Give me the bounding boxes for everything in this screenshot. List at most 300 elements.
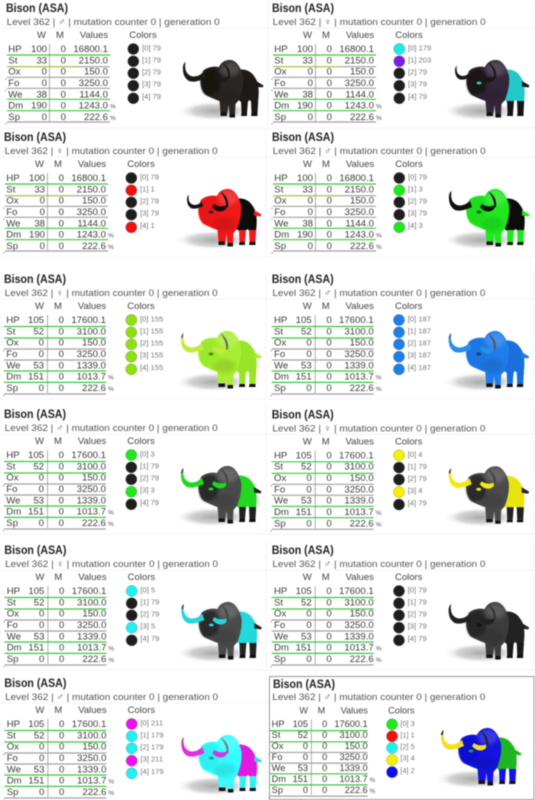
stats table: % xyxy=(370,788,376,795)
stats table: 0 xyxy=(308,78,313,89)
stats table: 0 xyxy=(308,112,313,123)
stats table: % xyxy=(376,510,382,517)
color swatches: [0] 79 xyxy=(140,172,159,182)
stats table: 222.6 xyxy=(84,112,108,123)
stats table: 17600.1 xyxy=(339,450,374,461)
stats table: 150.0 xyxy=(350,196,374,207)
stats table: 0 xyxy=(327,44,332,55)
stats table: HP xyxy=(6,173,20,184)
stats table: 151 xyxy=(296,372,312,383)
stats table: 0 xyxy=(327,101,332,112)
stats table: We xyxy=(274,360,288,371)
stats table: 100 xyxy=(297,173,313,184)
stats table: 0 xyxy=(306,349,312,360)
stats table: HP xyxy=(274,450,287,461)
color swatches: [1] 79 xyxy=(408,462,427,471)
stats table: 0 xyxy=(59,484,64,495)
stats table: Dm xyxy=(272,774,286,784)
color swatches: [2] 79 xyxy=(142,68,161,76)
stats table: Values xyxy=(341,706,368,716)
stats table: 222.6 xyxy=(82,241,106,252)
stats table: 0 xyxy=(59,173,64,184)
stats table: 0 xyxy=(326,518,332,529)
panel: bison 3, red xyxy=(0,129,266,257)
stats table: 3250.0 xyxy=(344,349,374,360)
stats table: 0 xyxy=(61,89,66,100)
stats table: Sp xyxy=(6,518,18,529)
stats table: Dm xyxy=(6,230,21,241)
stats table: 0 xyxy=(326,620,332,631)
stats table: 53 xyxy=(298,763,308,773)
color swatches xyxy=(126,718,164,779)
color swatches: [4] 79 xyxy=(142,92,161,101)
title: Bison (ASA) xyxy=(4,676,66,690)
stats table: HP xyxy=(6,450,20,461)
stats table: 1013.7 xyxy=(77,643,106,654)
stats table: % xyxy=(108,386,114,393)
stats table: Dm xyxy=(274,507,289,518)
stats table: 1144.0 xyxy=(345,89,374,100)
stats table: 1144.0 xyxy=(77,218,106,229)
stats table: Values xyxy=(346,436,374,447)
stats table: 33 xyxy=(302,55,313,66)
title: Bison (ASA) xyxy=(272,1,334,15)
level info line: Level 362 | ♂ | mutation counter 0 | generation 0 xyxy=(5,423,218,434)
stats table: Values xyxy=(80,30,108,41)
stats table: 150.0 xyxy=(350,609,374,620)
stats table: 0 xyxy=(327,196,332,207)
stats table: St xyxy=(7,730,16,741)
icon: bison xyxy=(175,735,262,796)
level info line: Level 362 | ♂ | mutation counter 0 | generation 0 xyxy=(272,288,485,299)
stats table: 52 xyxy=(33,461,44,472)
stats table: 52 xyxy=(33,326,44,337)
stats table: Colors xyxy=(127,301,155,312)
stats table: 0 xyxy=(327,55,332,66)
stats table: 150.0 xyxy=(345,741,368,751)
title: Bison (ASA) xyxy=(4,272,66,286)
stats table: Colors xyxy=(127,436,155,447)
stats table: 0 xyxy=(326,643,332,654)
stats table: 0 xyxy=(59,473,64,484)
stats table: % xyxy=(108,244,114,251)
color swatches xyxy=(126,172,159,233)
stats table: 2150.0 xyxy=(345,55,374,66)
stats table: 17600.1 xyxy=(339,315,374,326)
stats table: Ox xyxy=(7,609,19,620)
stats table: W xyxy=(299,706,308,716)
stats table: 0 xyxy=(326,383,332,394)
stats table: Fo xyxy=(274,620,285,631)
stats table: 190 xyxy=(31,101,47,112)
stats table: % xyxy=(376,233,382,240)
stats table: Fo xyxy=(7,620,18,631)
color swatches: [4] 79 xyxy=(408,498,427,507)
stats table: 53 xyxy=(301,631,312,642)
stats table: 0 xyxy=(306,383,312,394)
stats table: 0 xyxy=(306,518,312,529)
title: Bison (ASA) xyxy=(6,1,68,15)
stats table: Dm xyxy=(274,372,289,383)
color swatches: [4] 155 xyxy=(140,363,163,372)
stats table: 222.6 xyxy=(350,241,374,252)
stats table: 105 xyxy=(28,719,44,730)
stats table: % xyxy=(108,790,114,797)
stats table: 0 xyxy=(326,315,332,326)
stats table: Sp xyxy=(7,787,18,798)
stats table: 0 xyxy=(327,78,332,89)
stats table: 3100.0 xyxy=(344,326,374,337)
stats table: 3250.0 xyxy=(339,752,368,762)
color swatches: [2] 79 xyxy=(140,196,159,206)
stats table: Ox xyxy=(7,742,19,753)
panel: bison 5, lime xyxy=(0,271,266,399)
title: Bison (ASA) xyxy=(272,272,334,286)
stats table: St xyxy=(7,597,16,608)
color swatches: [1] 187 xyxy=(408,326,431,336)
stats table: 0 xyxy=(308,207,313,218)
stats table: 0 xyxy=(59,196,64,207)
stats table: HP xyxy=(274,586,287,597)
stats table: % xyxy=(376,244,382,251)
title: Bison (ASA) xyxy=(272,407,334,421)
stats table: 0 xyxy=(40,241,45,252)
color swatches: [4] 79 xyxy=(140,498,159,507)
stats table: W xyxy=(303,301,312,312)
stats table: 0 xyxy=(59,787,64,798)
stats table: Ox xyxy=(274,473,286,484)
color swatches xyxy=(394,172,427,233)
stats table: 0 xyxy=(39,518,44,529)
stats table: M xyxy=(54,436,62,447)
stats table: 0 xyxy=(59,776,64,787)
stats table: 0 xyxy=(40,207,45,218)
stats table: 1243.0 xyxy=(77,230,106,241)
stats table: We xyxy=(274,496,288,507)
stats table: 150.0 xyxy=(84,67,108,78)
color swatches: [2] 5 xyxy=(400,742,415,751)
stats table: 0 xyxy=(306,620,312,631)
color swatches: [4] 1 xyxy=(140,221,155,230)
stats table: 2150.0 xyxy=(79,55,108,66)
stats table: 100 xyxy=(31,44,47,55)
stats table: 3250.0 xyxy=(77,207,106,218)
stats table: 190 xyxy=(29,230,45,241)
stats table: St xyxy=(6,326,16,337)
stats table: 222.6 xyxy=(350,518,374,529)
stats table: 17600.1 xyxy=(339,586,374,597)
color swatches: [0] 5 xyxy=(140,586,155,594)
stats table: Ox xyxy=(274,609,286,620)
stats table: Colors xyxy=(129,30,157,41)
stats table: St xyxy=(6,184,16,195)
stats table: 0 xyxy=(59,360,64,371)
stats table: HP xyxy=(6,315,20,326)
stats table: W xyxy=(37,30,46,41)
stats table: 151 xyxy=(296,643,312,654)
stats table: 0 xyxy=(327,230,332,241)
stats table: W xyxy=(35,301,44,312)
stats table: Sp xyxy=(274,241,286,252)
stats table: 150.0 xyxy=(82,609,106,620)
color swatches: [0] 155 xyxy=(140,314,163,324)
stats table: M xyxy=(54,705,62,716)
color swatches: [3] 79 xyxy=(142,80,161,88)
color swatches: [1] 203 xyxy=(408,56,431,64)
stats table: 150.0 xyxy=(350,473,374,484)
stats table: Fo xyxy=(274,78,286,89)
stats table: Sp xyxy=(7,654,18,665)
color swatches: [2] 79 xyxy=(140,610,159,618)
icon: bison xyxy=(443,60,530,121)
stats table: 0 xyxy=(326,654,332,665)
stats table: 0 xyxy=(59,597,64,608)
stats table: 0 xyxy=(59,631,64,642)
stats table: Values xyxy=(78,301,106,312)
stats table: 3100.0 xyxy=(77,461,106,472)
stats table: 0 xyxy=(59,518,64,529)
color swatches: [3] 4 xyxy=(408,486,422,495)
color swatches: [2] 79 xyxy=(140,474,159,482)
level info line: Level 362 | ♂ | mutation counter 0 | generation 0 xyxy=(272,559,485,570)
level info line: Level 362 | ♂ | mutation counter 0 | generation 0 xyxy=(273,146,486,157)
color swatches: [3] 79 xyxy=(140,208,159,218)
color swatches: [0] 4 xyxy=(408,450,422,459)
stats table: Colors xyxy=(127,159,155,170)
stats table: 150.0 xyxy=(82,473,106,484)
stats table: 105 xyxy=(28,315,44,326)
color swatches xyxy=(393,314,431,375)
stats table: 3250.0 xyxy=(77,753,106,764)
stats table: 0 xyxy=(322,763,327,773)
stats table: We xyxy=(6,495,21,506)
stats table: HP xyxy=(7,719,20,730)
stats table: Dm xyxy=(7,643,22,654)
stats table: 222.6 xyxy=(345,785,368,795)
stats table: 0 xyxy=(322,719,327,729)
stats table: 0 xyxy=(308,241,313,252)
stats table: 16800.1 xyxy=(73,44,108,55)
stats table: 2150.0 xyxy=(345,184,374,195)
stats table: 0 xyxy=(308,67,313,78)
stats table: % xyxy=(376,646,382,653)
stats table: % xyxy=(108,233,114,240)
color swatches: [2] 79 xyxy=(408,610,427,618)
stats table: Ox xyxy=(6,338,19,349)
stats table: 190 xyxy=(297,230,313,241)
stats table: 222.6 xyxy=(82,654,106,665)
level info line: Level 362 | ♀ | mutation counter 0 | generation 0 xyxy=(5,146,218,157)
stats table: Dm xyxy=(6,372,21,383)
stats table: St xyxy=(274,55,284,66)
stats table: 52 xyxy=(34,597,44,608)
color swatches: [3] 79 xyxy=(408,208,427,218)
stats table: 222.6 xyxy=(350,112,374,123)
stats table: 3100.0 xyxy=(344,462,374,473)
stats table: 1013.7 xyxy=(77,507,106,518)
stats table: 0 xyxy=(59,742,64,753)
stats table: 151 xyxy=(28,507,44,518)
stats table: 1339.0 xyxy=(344,631,374,642)
stats table: 0 xyxy=(42,112,47,123)
stats table: % xyxy=(376,386,382,393)
title: Bison (ASA) xyxy=(272,543,334,557)
panel: bison 6, blue xyxy=(268,271,534,399)
stats table: 150.0 xyxy=(350,67,374,78)
stats table: We xyxy=(6,218,21,229)
stats table: 0 xyxy=(326,372,332,383)
stats table: 0 xyxy=(327,241,332,252)
stats table: We xyxy=(6,360,21,371)
stats table: 0 xyxy=(59,753,64,764)
icon: bison xyxy=(443,466,529,527)
stats table: 0 xyxy=(322,752,327,762)
stats table: Dm xyxy=(8,101,23,112)
stats table: 0 xyxy=(39,609,44,620)
stats table: St xyxy=(274,462,283,473)
color swatches: [2] 79 xyxy=(408,196,427,206)
icon: bison xyxy=(443,189,530,250)
stats table: 1339.0 xyxy=(339,763,368,773)
color swatches: [0] 3 xyxy=(140,450,155,458)
color swatches: [3] 79 xyxy=(408,80,427,88)
icon: bison xyxy=(175,331,262,392)
stats table: 0 xyxy=(61,112,66,123)
stats table: HP xyxy=(274,173,288,184)
icon: bison xyxy=(175,466,262,527)
stats table: 1339.0 xyxy=(344,496,374,507)
stats table: St xyxy=(272,730,281,740)
stats table: 3100.0 xyxy=(344,597,374,608)
stats table: Ox xyxy=(6,196,19,207)
stats table: 150.0 xyxy=(350,338,374,349)
level info line: Level 362 | ♂ | mutation counter 0 | generation 0 xyxy=(5,692,218,703)
stats table xyxy=(271,572,423,668)
stats table: 52 xyxy=(298,730,308,740)
color swatches: [1] 79 xyxy=(140,462,159,470)
color swatches xyxy=(126,449,159,510)
stats table: Values xyxy=(346,159,374,170)
stats table: W xyxy=(303,159,312,170)
color swatches: [4] 187 xyxy=(408,363,431,372)
stats table: M xyxy=(322,159,330,170)
stats table: HP xyxy=(8,44,22,55)
stats table: Sp xyxy=(274,383,286,394)
stats table: 3250.0 xyxy=(79,78,108,89)
level info line: Level 362 | ♀ | mutation counter 0 | generation 0 xyxy=(272,423,485,434)
stats table: 0 xyxy=(59,586,64,597)
panel: bison 4, green xyxy=(268,129,534,257)
stats table: 0 xyxy=(326,326,332,337)
stats table: 0 xyxy=(39,349,44,360)
level info line: Level 362 | ♂ | mutation counter 0 | generation 0 xyxy=(272,692,485,703)
stats table: Dm xyxy=(274,643,289,654)
stats table: 0 xyxy=(326,450,332,461)
stats table: 0 xyxy=(59,609,64,620)
stats table: St xyxy=(6,461,16,472)
color swatches: [3] 187 xyxy=(408,350,431,360)
icon: bison xyxy=(177,60,264,121)
stats table: 1339.0 xyxy=(77,631,106,642)
stats table: 151 xyxy=(28,372,44,383)
stats table: 3250.0 xyxy=(77,484,106,495)
stats table xyxy=(4,159,155,254)
color swatches: [1] 1 xyxy=(140,184,155,194)
stats table: 0 xyxy=(61,101,66,112)
stats table: 0 xyxy=(59,764,64,775)
stats table: Fo xyxy=(6,207,18,218)
stats table: 0 xyxy=(59,507,64,518)
color swatches xyxy=(128,43,161,104)
level info line: Level 362 | ♀ | mutation counter 0 | generation 0 xyxy=(5,288,218,299)
stats table: 0 xyxy=(326,360,332,371)
stats table: We xyxy=(7,764,21,775)
stats table: 3250.0 xyxy=(344,620,374,631)
stats table: 151 xyxy=(296,507,312,518)
stats table: 0 xyxy=(306,338,312,349)
stats table: We xyxy=(274,89,289,100)
title: Bison (ASA) xyxy=(272,130,334,144)
stats table: 3100.0 xyxy=(77,326,106,337)
stats table: Values xyxy=(78,159,106,170)
stats table: M xyxy=(54,301,62,312)
stats table: Fo xyxy=(8,78,20,89)
stats table: 222.6 xyxy=(350,383,374,394)
stats table: 0 xyxy=(59,450,64,461)
stats table: 1339.0 xyxy=(77,495,106,506)
stats table: 16800.1 xyxy=(339,173,374,184)
stats table: W xyxy=(35,436,44,447)
color swatches: [4] 79 xyxy=(408,92,427,101)
stats table: % xyxy=(108,779,114,786)
stats table: 3100.0 xyxy=(77,730,106,741)
stats table: 105 xyxy=(296,315,312,326)
stats table: St xyxy=(274,597,283,608)
stats table: 38 xyxy=(302,218,313,229)
stats table: 0 xyxy=(303,741,308,751)
stats table: 151 xyxy=(28,643,44,654)
stats table: Values xyxy=(78,705,107,716)
stats table: M xyxy=(322,301,330,312)
icon: bison xyxy=(175,602,262,663)
stats table: 1013.7 xyxy=(344,643,374,654)
stats table: % xyxy=(376,104,382,111)
stats table: Fo xyxy=(274,207,286,218)
stats table: Values xyxy=(78,572,107,583)
color swatches: [1] 155 xyxy=(140,326,163,336)
stats table: 38 xyxy=(36,89,47,100)
stats table: 0 xyxy=(61,55,66,66)
stats table: 0 xyxy=(39,787,44,798)
stats table: Colors xyxy=(388,706,415,716)
stats table xyxy=(271,436,423,532)
stats table: 0 xyxy=(327,67,332,78)
stats table: 2150.0 xyxy=(77,184,106,195)
stats table: 0 xyxy=(327,173,332,184)
color swatches xyxy=(394,43,431,104)
color swatches: [2] 79 xyxy=(408,68,427,76)
stats table: 0 xyxy=(322,785,327,795)
stats table: W xyxy=(35,572,44,583)
stats table: Dm xyxy=(274,230,289,241)
stats table: % xyxy=(376,375,382,382)
panel: bison 7, green rear and horns xyxy=(0,406,266,534)
stats table: Colors xyxy=(395,301,423,312)
stats table: 16800.1 xyxy=(71,173,106,184)
color swatches: [3] 155 xyxy=(140,350,163,360)
stats table: 105 xyxy=(293,719,308,729)
color swatches xyxy=(386,719,415,778)
